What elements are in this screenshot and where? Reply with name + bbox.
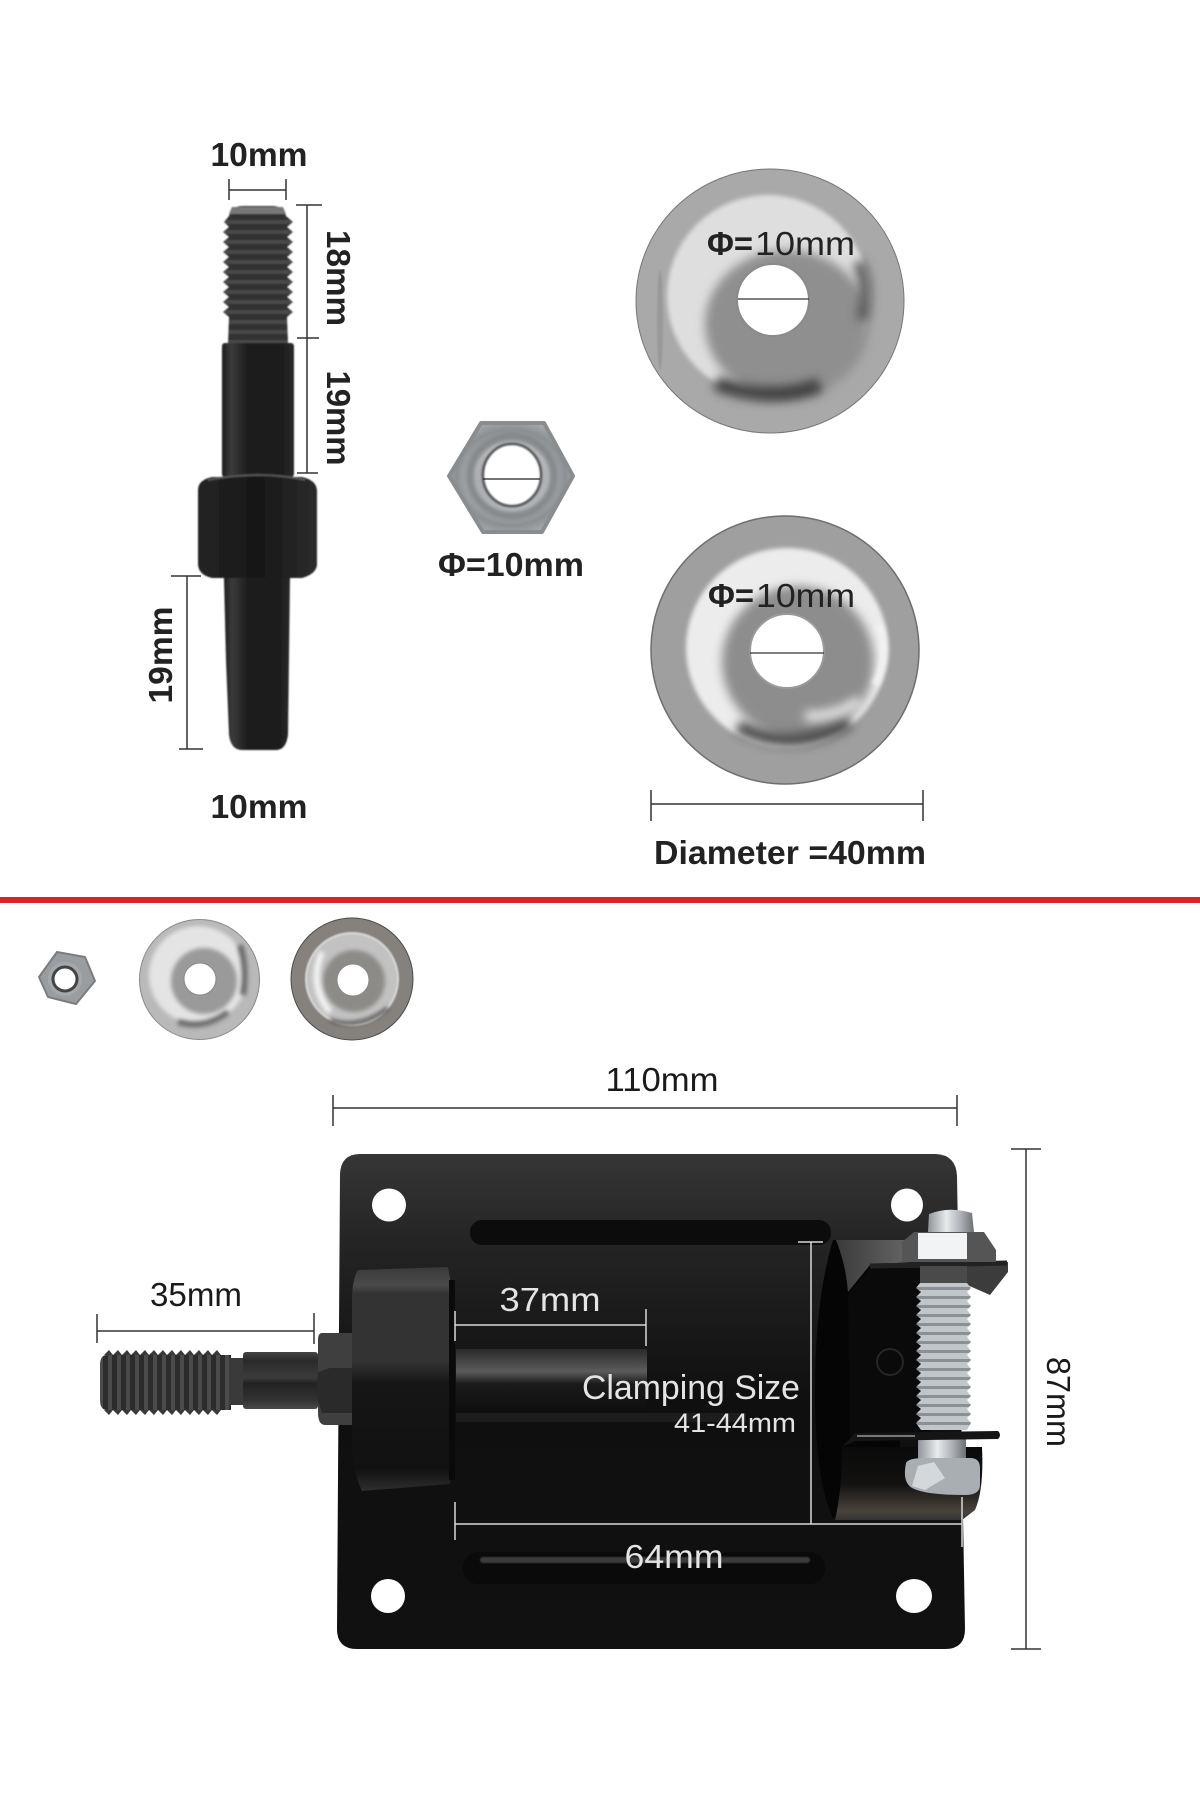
dimension: lower shaft length [142,576,203,749]
label: nut bore: Φ=10mm [438,546,584,583]
dimension: top width: 10mm [210,136,308,173]
icon: threaded stud and hub [100,1267,746,1491]
icon: clamp saddle with bolt [815,1210,1008,1520]
dimension: thread and shoulder lengths [296,205,357,473]
label: washer bore: Φ= [707,225,753,262]
label: washer bore [707,225,855,262]
divider: red rule [0,897,1200,903]
dimension: stud length [97,1276,314,1344]
icon: washer back [651,516,919,784]
dimension: overall height [1011,1149,1077,1649]
label: washer diameter: Diameter =40mm [654,834,926,871]
label: washer bore: Φ= [708,577,754,614]
label: washer bore: 10mm [755,225,855,262]
icon: hex nut [449,423,573,532]
dimension: overall height: 87mm [1040,1357,1077,1447]
icon: threaded spindle bolt [198,206,317,750]
dimension: inner shaft length [455,1281,646,1346]
dimension: top width [210,136,308,200]
label: bottom width: 10mm [210,788,308,825]
label: clamping size [582,1369,800,1438]
panel: small parts row [39,918,413,1040]
icon: clamp base plate [337,1154,965,1649]
dimension: clamp span: 64mm [624,1538,724,1575]
dimension: washer diameter [651,790,923,821]
dimension: overall width: 110mm [606,1061,718,1098]
icon: washer front [636,169,904,433]
label: washer bore [708,577,855,614]
dimension: overall width [333,1061,957,1126]
panel: lower washer [651,516,926,871]
label: clamping size: 41-44mm [674,1408,796,1438]
panel: clamp bracket [97,1061,1077,1649]
dimension: thread and shoulder lengths: 19mm [320,370,357,466]
icon: small washer back [291,918,413,1040]
panel: large hex nut [438,423,584,583]
dimension: lower shaft length: 19mm [142,606,179,704]
label: washer bore: 10mm [756,577,855,614]
dimension: thread and shoulder lengths: 18mm [320,230,357,326]
panel: upper washer [636,169,904,433]
icon: small hex nut [39,952,95,1004]
dimension: clamp span [455,1242,962,1575]
icon: small washer front [140,920,260,1040]
dimension: stud length: 35mm [150,1276,242,1313]
dimension: inner shaft length: 37mm [500,1281,600,1318]
panel: spindle bolt with dimensions [142,136,357,825]
label: clamping size: Clamping Size [582,1369,800,1407]
